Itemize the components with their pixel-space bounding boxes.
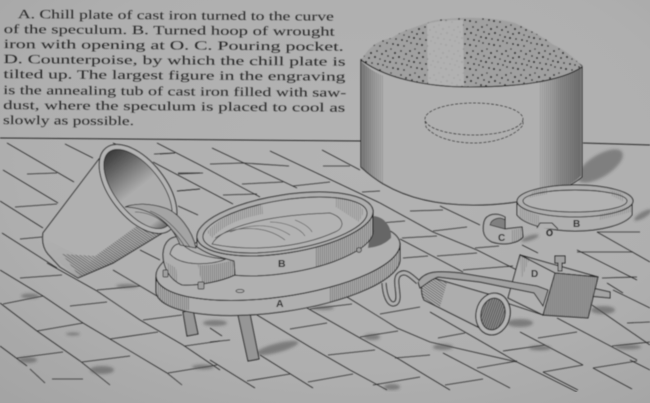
gap in sawdust showing the speculum column bbox=[427, 20, 464, 87]
small hoop B: B bbox=[573, 219, 580, 230]
legs of chill plate bbox=[183, 310, 259, 361]
counterpoise D: D bbox=[531, 269, 538, 280]
pouring pocket C bbox=[483, 214, 523, 244]
dashed speculum outline bbox=[425, 103, 523, 143]
caption text: of the speculum. B. Turned hoop of wrought bbox=[4, 22, 336, 39]
pouring pocket on plate bbox=[163, 237, 235, 289]
tub wall bbox=[361, 60, 582, 205]
pouring pocket C: C bbox=[498, 233, 505, 244]
floor shadows bbox=[19, 207, 650, 390]
pouring stream bbox=[125, 204, 196, 248]
hoop inner hatching bbox=[207, 204, 263, 238]
caption text: is the annealing tub of cast iron filled with saw- bbox=[3, 83, 346, 100]
dark recess at right bbox=[368, 216, 391, 248]
small hoop B bbox=[517, 185, 633, 238]
ladle rim bbox=[84, 131, 192, 247]
caption text: dust, where the speculum is placed to cool as bbox=[3, 98, 345, 115]
caption text: iron with opening at O. C. Pouring pocket. bbox=[4, 37, 344, 54]
small hoop B: O bbox=[546, 228, 553, 238]
floor of paving bricks bbox=[0, 143, 650, 392]
knob bbox=[555, 256, 565, 271]
lever arm bbox=[418, 272, 548, 306]
chill plate A: A bbox=[276, 298, 284, 310]
tail tab bbox=[590, 288, 610, 298]
caption text: slowly as possible. bbox=[3, 113, 134, 128]
chill plate A bbox=[151, 206, 405, 316]
caption text: A. Chill plate of cast iron turned to the curve bbox=[18, 7, 334, 24]
horizon line bbox=[0, 138, 650, 145]
molten metal surface bbox=[212, 213, 342, 248]
back rim of tub bbox=[361, 45, 582, 66]
caption text bbox=[3, 7, 347, 130]
block faces bbox=[520, 255, 598, 277]
annealing tub bbox=[361, 18, 582, 205]
cylinder weight bbox=[422, 276, 498, 332]
sawdust mound bbox=[361, 18, 582, 87]
ladle interior bbox=[91, 138, 185, 240]
opening O bbox=[537, 223, 558, 229]
counterpoise D bbox=[384, 255, 610, 338]
caption text: tilted up. The largest figure in the engraving bbox=[3, 67, 347, 84]
tub wall shading bbox=[362, 62, 384, 186]
caption text: D. Counterpoise, by which the chill plate is bbox=[3, 52, 346, 69]
pouring ladle bbox=[43, 131, 196, 278]
S hook bbox=[384, 273, 418, 304]
turned hoop B: B bbox=[278, 258, 286, 270]
tub shadow bbox=[572, 143, 628, 189]
turned hoop B bbox=[196, 190, 374, 277]
ladle body bbox=[43, 159, 164, 278]
